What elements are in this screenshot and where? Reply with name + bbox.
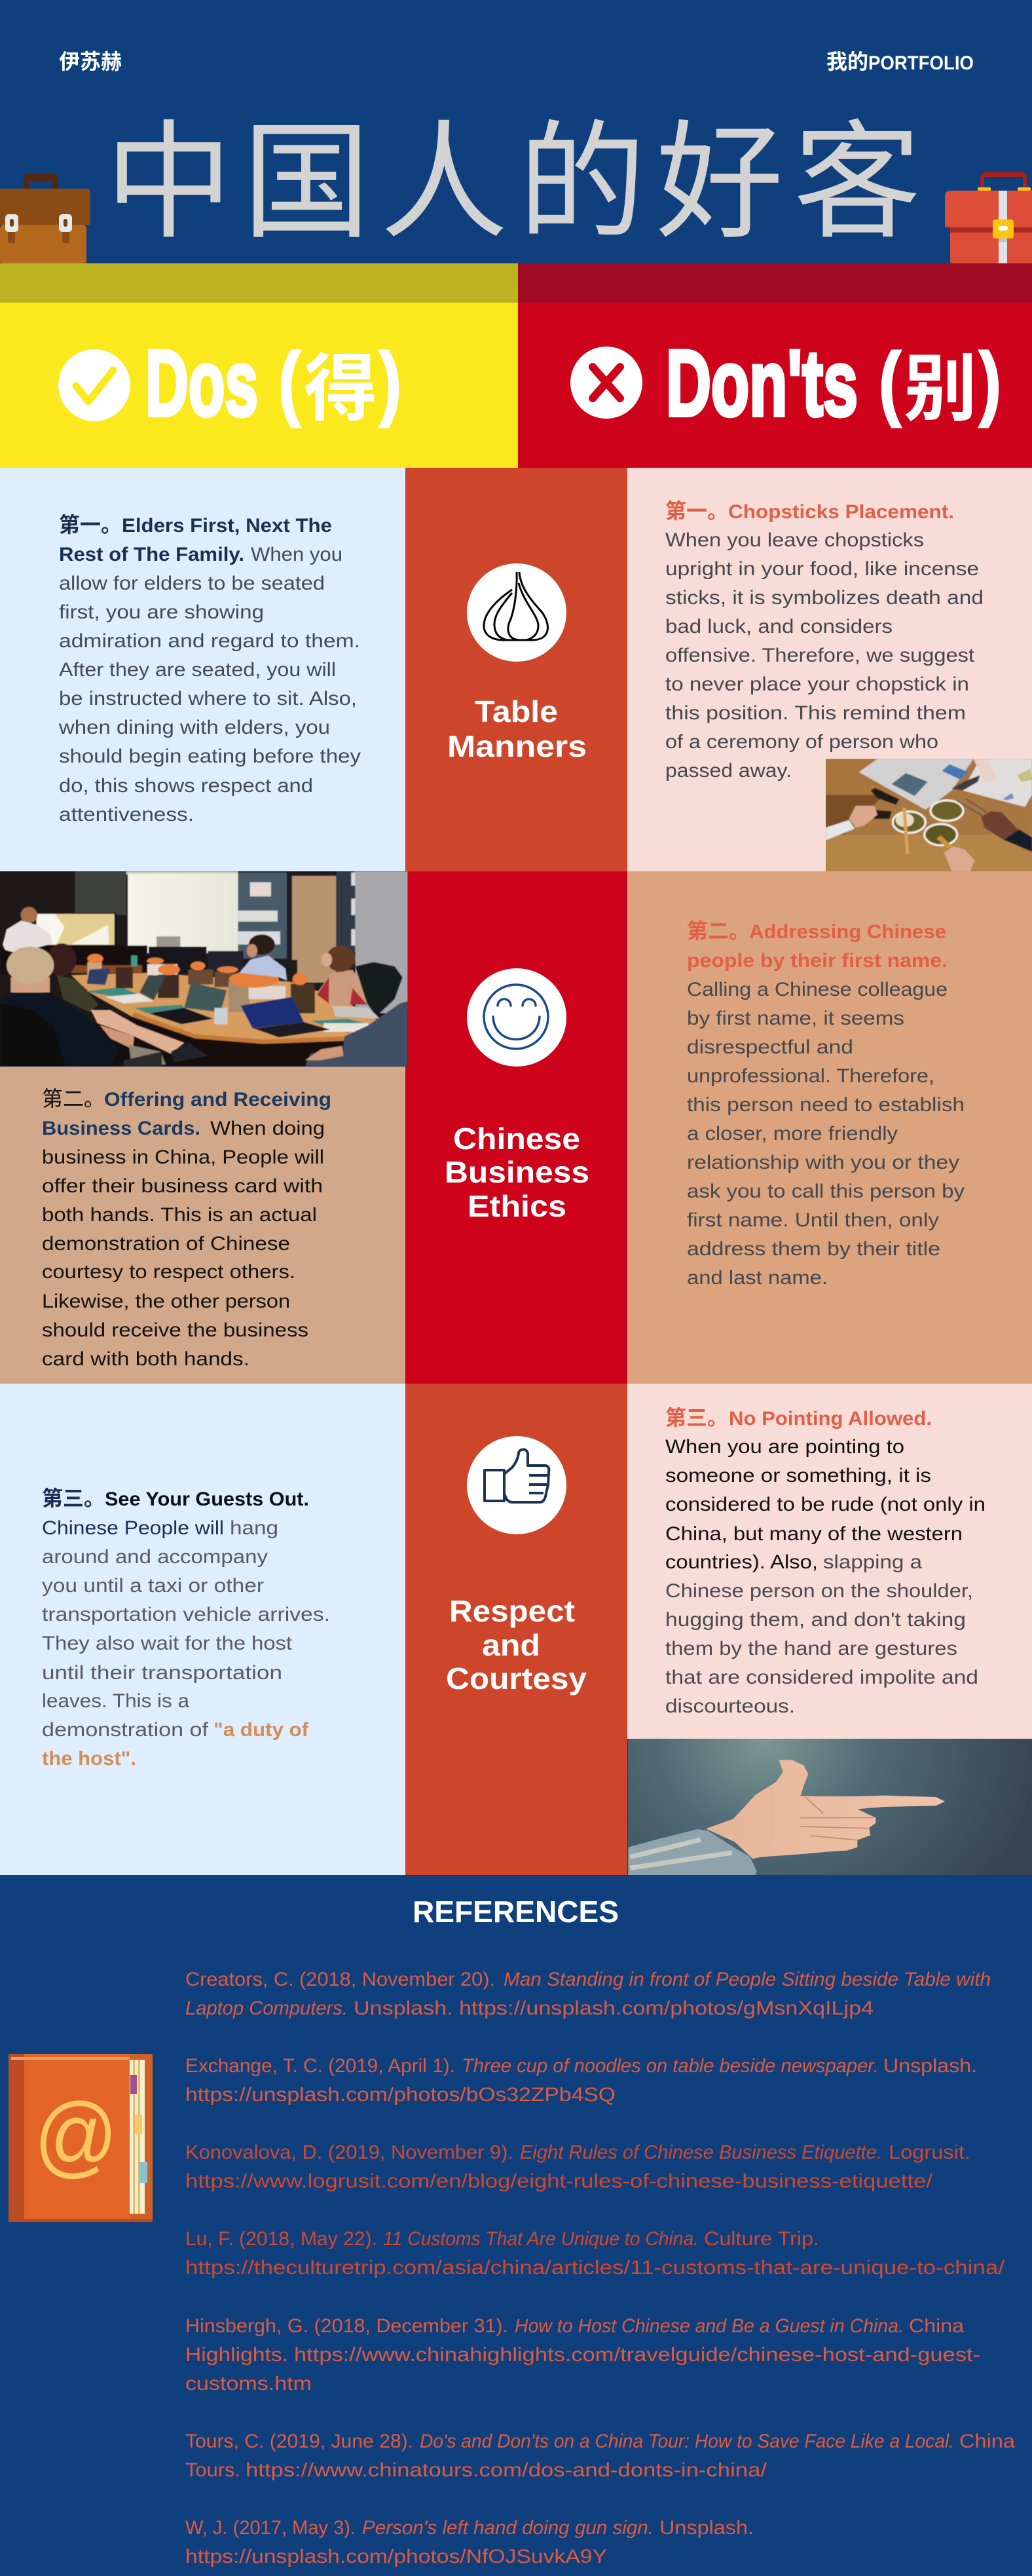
panel: dont 3 no pointing: someone or something, it is [665,1465,931,1487]
icon: brown briefcase [0,174,90,265]
reference: tours [185,2431,1015,2481]
reference: konovalova [185,2142,970,2192]
dos heading [145,330,401,436]
panel: do 1 elders first: Rest of The Family. [59,544,244,565]
panel: do 2 business cards: Likewise, the other person [42,1291,290,1312]
photo: noodles and newspaper [826,759,1032,871]
panel: dont 3 no pointing: considered to be rude (not only in [665,1494,986,1515]
author name: 伊苏赫 [59,45,122,75]
panel: dos header [0,303,518,468]
title: 中国人的好客 [105,79,921,264]
icon: red briefcase [945,172,1032,265]
panel: do 3 see guests out [0,1384,405,1875]
portfolio label [826,45,974,75]
panel: do 3 see guests out: They also wait for the host [42,1633,293,1654]
donts heading: Don'ts [666,331,858,436]
reference: exchange: Three cup of noodles on table beside newspaper. [462,2055,879,2077]
panel: dont 1 chopsticks [627,468,1032,871]
reference: lu: https://theculturetrip.com/asia/china/articles/11-customs-that-are-unique-to-china/ [185,2257,1005,2279]
panel: chinese business ethics [405,871,627,1384]
reference: lu: Lu, F. (2018, May 22). [185,2228,377,2250]
panel: dont 2 first names: Calling a Chinese colleague [687,979,948,1000]
donts heading: ( [879,337,901,428]
heading: references: REFERENCES [413,1895,619,1929]
reference: creators: Unsplash. https://unsplash.com/photos/gMsnXqILjp4 [354,1998,874,2019]
panel: dont 2 first names: address them by their title [687,1238,940,1260]
panel: do 2 business cards: When doing [210,1118,325,1139]
reference: tours: Tours, C. (2019, June 28). [185,2431,413,2452]
panel: do 3 see guests out: Chinese People will [42,1517,224,1539]
reference: tours: Do's and Don'ts on a China Tour: How to Save Face Like a Local. [420,2431,954,2452]
panel: do 3 see guests out: leaves. This is a [42,1690,189,1712]
reference: hinsbergh: How to Host Chinese and Be a Guest in China. [515,2315,904,2337]
icon: check circle [58,349,130,421]
panel: do 1 elders first: admiration and regard to them. [59,630,360,652]
reference: hinsbergh: customs.htm [185,2373,312,2395]
icon: thumbs up [467,1436,566,1534]
band: dark red [518,263,1032,303]
panel: do 3 see guests out: the host". [42,1748,136,1770]
header background [0,0,1032,263]
panel: dont 2 first names: and last name. [687,1267,828,1289]
label: table manners: Manners [447,729,587,763]
label: respect and courtesy: and [482,1628,540,1662]
panel: do 2 business cards: demonstration of Chinese [42,1233,290,1255]
reference: konovalova: Konovalova, D. (2019, November 9). [185,2142,513,2163]
label: respect and courtesy [446,1594,587,1695]
panel: do 1 elders first [0,468,405,871]
panel: dont 1 chopsticks: sticks, it is symbolizes death and [665,587,984,609]
label: respect and courtesy: Respect [449,1594,575,1628]
panel: do 1 elders first: allow for elders to be seated [59,573,325,594]
panel: do 2 business cards: should receive the business [42,1319,308,1341]
panel: dont 1 chopsticks: of a ceremony of person who [665,731,938,753]
panel: dont 3 no pointing: China, but many of the western [665,1523,963,1545]
reference: exchange: Unsplash. [883,2055,977,2077]
panel: dont 2 first names: first name. Until then, only [687,1209,939,1231]
band: olive [0,263,518,303]
panel: do 3 see guests out: hang [230,1517,278,1539]
panel: do 1 elders first: When you [251,544,342,565]
panel: do 1 elders first: be instructed where to sit. Also, [59,688,357,710]
reference: tours: Tours. [185,2459,240,2481]
panel: dont 3 no pointing: discourteous. [665,1695,795,1717]
panel: do 1 elders first: should begin eating before they [59,746,361,767]
panel: do 3 see guests out: transportation vehicle arrives. [42,1604,330,1625]
panel: dont 3 no pointing: hugging them, and don't taking [665,1609,966,1631]
dos heading: 得 [304,330,377,436]
panel: do 3 see guests out: See Your Guests Out. [105,1488,309,1510]
dos heading: Dos [145,331,258,436]
reference: exchange [185,2055,977,2106]
label: table manners: Table [475,694,558,729]
panel: dont 3 no pointing: slapping a [823,1551,922,1573]
panel: do 1 elders first: do, this shows respect and [59,775,313,797]
panel: do 3 see guests out: around and accompany [42,1546,268,1568]
panel: do 2 business cards: 第二。 [42,1082,105,1112]
reference: hinsbergh [185,2315,980,2395]
panel: dont 2 first names: relationship with you or they [687,1152,959,1173]
reference: lu [185,2228,1005,2279]
reference: creators: Man Standing in front of People Sitting beside Table with [504,1969,991,1990]
reference: w j: https://unsplash.com/photos/NfOJSuvkA9Y [185,2546,607,2567]
panel: dont 3 no pointing: them by the hand are gestures [665,1638,957,1659]
portfolio label: 我的 [826,45,868,75]
reference: creators: Creators, C. (2018, November 20). [185,1969,495,1990]
panel: do 3 see guests out: you until a taxi or other [42,1575,264,1597]
panel: do 1 elders first: After they are seated, you will [59,659,336,681]
reference: creators [185,1969,991,2019]
panel: dont 2 first names: unprofessional. Therefore, [687,1065,934,1087]
panel: do 1 elders first: Elders First, Next The [122,515,332,537]
panel: dont 3 no pointing: that are considered impolite and [665,1667,978,1688]
panel: dont 3 no pointing: Chinese person on the shoulder, [665,1580,973,1602]
reference: w j: Unsplash. [659,2517,754,2539]
reference: exchange: https://unsplash.com/photos/bOs32ZPb4SQ [185,2084,616,2106]
panel: do 2 business cards: Business Cards. [42,1118,200,1139]
reference: konovalova: Eight Rules of Chinese Business Etiquette. [520,2142,882,2163]
panel: do 2 business cards: business in China, People will [42,1146,324,1168]
label: table manners [447,694,587,763]
reference: tours: China [959,2431,1015,2452]
panel: dont 2 first names: disrespectful and [687,1036,853,1058]
label: respect and courtesy: Courtesy [446,1661,587,1695]
reference: creators: Laptop Computers. [185,1998,348,2019]
reference: konovalova: https://www.logrusit.com/en/blog/eight-rules-of-chinese-business-etiquette/ [185,2170,933,2192]
panel: dont 1 chopsticks: this position. This remind them [665,702,966,724]
panel: dont 3 no pointing: When you are pointing to [665,1436,904,1458]
panel: do 1 elders first: attentiveness. [59,804,194,825]
panel: dont 1 chopsticks: offensive. Therefore, we suggest [665,645,975,666]
panel: dont 2 first names: by first name, it seems [687,1008,904,1029]
panel: dont 3 no pointing: countries). Also, [665,1551,818,1573]
dos heading: ) [379,337,401,428]
label: chinese business ethics: Chinese [453,1122,580,1156]
panel: dont 2 first names [627,871,1032,1384]
label: chinese business ethics: Business [445,1155,589,1189]
icon: garlic [467,563,566,662]
panel: donts header [518,303,1032,468]
panel: do 3 see guests out: demonstration of [42,1719,209,1741]
icon: address book: @ [34,2085,118,2186]
reference: lu: 11 Customs That Are Unique to China. [383,2228,699,2250]
dos heading: ( [278,337,301,428]
panel: dont 2 first names: this person need to establish [687,1094,965,1116]
panel: dont 2 first names: a closer, more friendly [687,1123,898,1145]
panel: dont 2 first names: Addressing Chinese [749,921,946,943]
reference: w j: Person's left hand doing gun sign. [362,2517,654,2539]
photo: business meeting [0,871,408,1067]
icon: address book [9,2054,153,2222]
panel: respect and courtesy [405,1384,627,1875]
panel: do 2 business cards: offer their business card with [42,1175,323,1197]
reference: hinsbergh: Hinsbergh, G. (2018, December 31). [185,2315,508,2337]
panel: dont 1 chopsticks: to never place your chopstick in [665,673,969,695]
panel: dont 3 no pointing [627,1384,1032,1739]
panel: dont 2 first names: 第二。 [687,915,750,945]
reference: hinsbergh: Highlights. [185,2344,288,2366]
panel: dont 1 chopsticks: 第一。 [665,495,728,525]
panel: dont 1 chopsticks: bad luck, and considers [665,616,893,637]
label: chinese business ethics: Ethics [468,1189,566,1223]
panel: do 2 business cards: card with both hands. [42,1348,249,1370]
photo: pointing hand [628,1739,1032,1875]
reference: konovalova: Logrusit. [889,2142,970,2163]
donts heading: 别 [904,330,977,436]
reference: tours: https://www.chinatours.com/dos-and-donts-in-china/ [246,2459,767,2481]
panel: dont 1 chopsticks: Chopsticks Placement. [728,501,954,523]
reference: lu: Culture Trip. [704,2228,819,2250]
panel: do 1 elders first: first, you are showing [59,601,264,623]
icon: smiley [467,968,566,1067]
panel: do 2 business cards: courtesy to respect others. [42,1261,295,1283]
panel: do 3 see guests out: until their transportation [42,1662,282,1684]
panel: dont 3 no pointing: No Pointing Allowed. [729,1408,932,1430]
panel: do 2 business cards: Offering and Receiving [104,1089,331,1110]
label: chinese business ethics [445,1122,589,1223]
reference: hinsbergh: https://www.chinahighlights.com/travelguide/chinese-host-and-guest- [294,2344,980,2366]
panel: dont 2 first names: ask you to call this person by [687,1181,965,1202]
donts heading: ) [979,337,1001,428]
panel: do 2 business cards: both hands. This is an actual [42,1204,317,1226]
panel: dont 1 chopsticks: When you leave chopsticks [665,529,924,551]
panel: do 1 elders first: when dining with elders, you [58,717,330,738]
panel: dont 1 chopsticks: passed away. [665,760,792,782]
panel: table manners [405,468,627,871]
reference: hinsbergh: China [909,2315,964,2337]
panel: do 3 see guests out: "a duty of [213,1719,309,1741]
reference: w j: W, J. (2017, May 3). [185,2517,356,2539]
panel: do 2 business cards [0,1067,405,1384]
portfolio label: PORTFOLIO [868,52,974,74]
panel: references [0,1875,1032,2576]
panel: dont 1 chopsticks: upright in your food, like incense [665,558,979,580]
icon: cross circle [570,347,642,419]
reference: exchange: Exchange, T. C. (2019, April 1). [185,2055,455,2077]
reference: w j [185,2517,754,2567]
panel: dont 3 no pointing: 第三。 [665,1401,728,1431]
panel: do 1 elders first: 第一。 [59,508,122,539]
panel: dont 2 first names: people by their first name. [687,950,948,972]
panel: do 3 see guests out: 第三。 [42,1482,105,1512]
